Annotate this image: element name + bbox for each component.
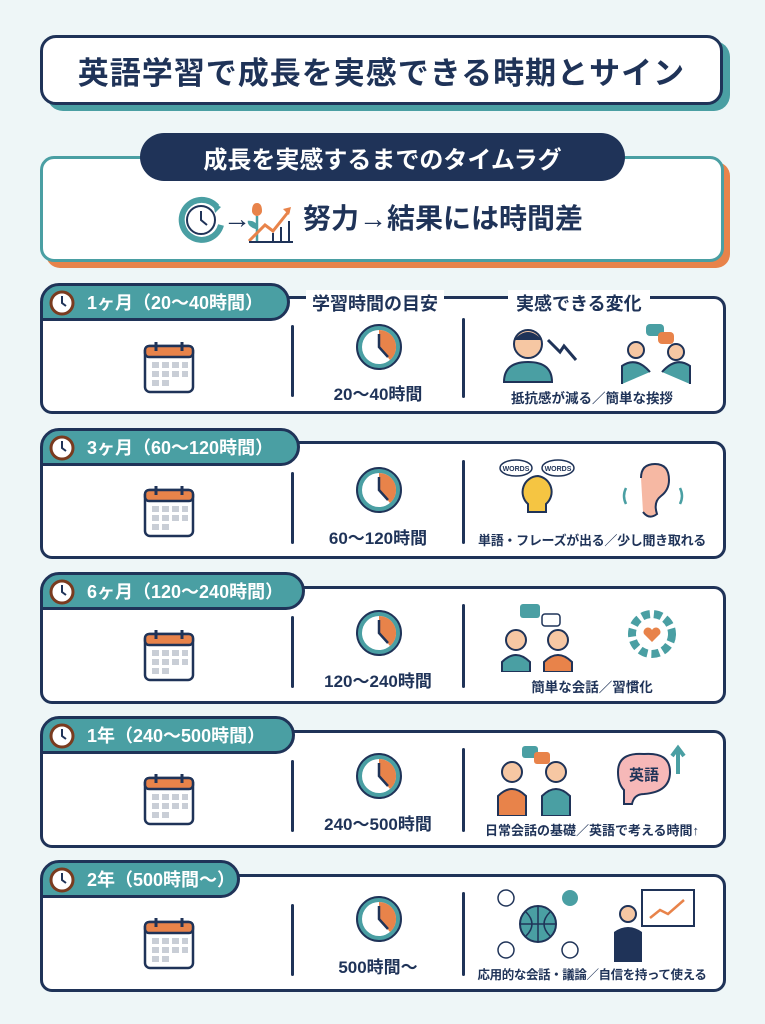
text: WORDS [545, 466, 572, 473]
heading: time lag: 成長を実感するまでのタイムラグ [203, 146, 562, 174]
clock icons [356, 324, 402, 942]
tab: 3 months [40, 428, 300, 466]
row 1 [40, 296, 726, 414]
text: 単語・フレーズが出る／少し聞き取れる [478, 533, 706, 548]
column header: change: 実感できる変化 [516, 294, 642, 314]
change labels [478, 391, 706, 982]
tab: 1 month: 1ヶ月（20〜40時間） [87, 293, 263, 313]
tab: 2 years [40, 860, 240, 898]
change icons [497, 324, 695, 962]
heading: time lag [140, 133, 625, 181]
title: 英語学習で成長を実感できる時期とサイン [78, 56, 685, 90]
tab: 2 years: 2年（500時間〜） [87, 870, 235, 890]
title [40, 35, 723, 105]
tab clocks [50, 290, 74, 892]
calendar icons [144, 342, 194, 970]
text: 抵抗感が減る／簡単な挨拶 [511, 391, 673, 406]
row 4 [40, 730, 726, 848]
text: 240〜500時間 [324, 815, 432, 834]
text: 英語 [629, 767, 659, 784]
text: 20〜40時間 [334, 385, 422, 404]
tab: 3 months: 3ヶ月（60〜120時間） [87, 438, 273, 458]
icon: clock cycle [178, 196, 224, 243]
text: WORDS [503, 466, 530, 473]
row 2 [40, 441, 726, 559]
text: 日常会話の基礎／英語で考える時間↑ [485, 823, 699, 838]
column header: study time: 学習時間の目安 [312, 294, 438, 314]
text: effort result: → 努力→結果には時間差 [223, 203, 583, 234]
text: 応用的な会話・議論／自信を持って使える [478, 968, 706, 982]
column header: change [508, 290, 650, 316]
text: 簡単な会話／習慣化 [531, 680, 653, 695]
dividers [291, 318, 465, 976]
tab: 6 months: 6ヶ月（120〜240時間） [87, 582, 283, 602]
tab: 1 year: 1年（240〜500時間） [87, 726, 265, 746]
tab: 6 months [40, 572, 305, 610]
panel: time lag [40, 156, 724, 262]
hours labels [324, 385, 432, 977]
tab: 1 year [40, 716, 295, 754]
row 3 [40, 586, 726, 704]
text: 60〜120時間 [329, 529, 427, 548]
icon: growth [248, 203, 293, 243]
row 5 [40, 874, 726, 992]
tab: 1 month [40, 283, 290, 321]
text: 120〜240時間 [324, 672, 432, 691]
text: 500時間〜 [338, 958, 418, 977]
